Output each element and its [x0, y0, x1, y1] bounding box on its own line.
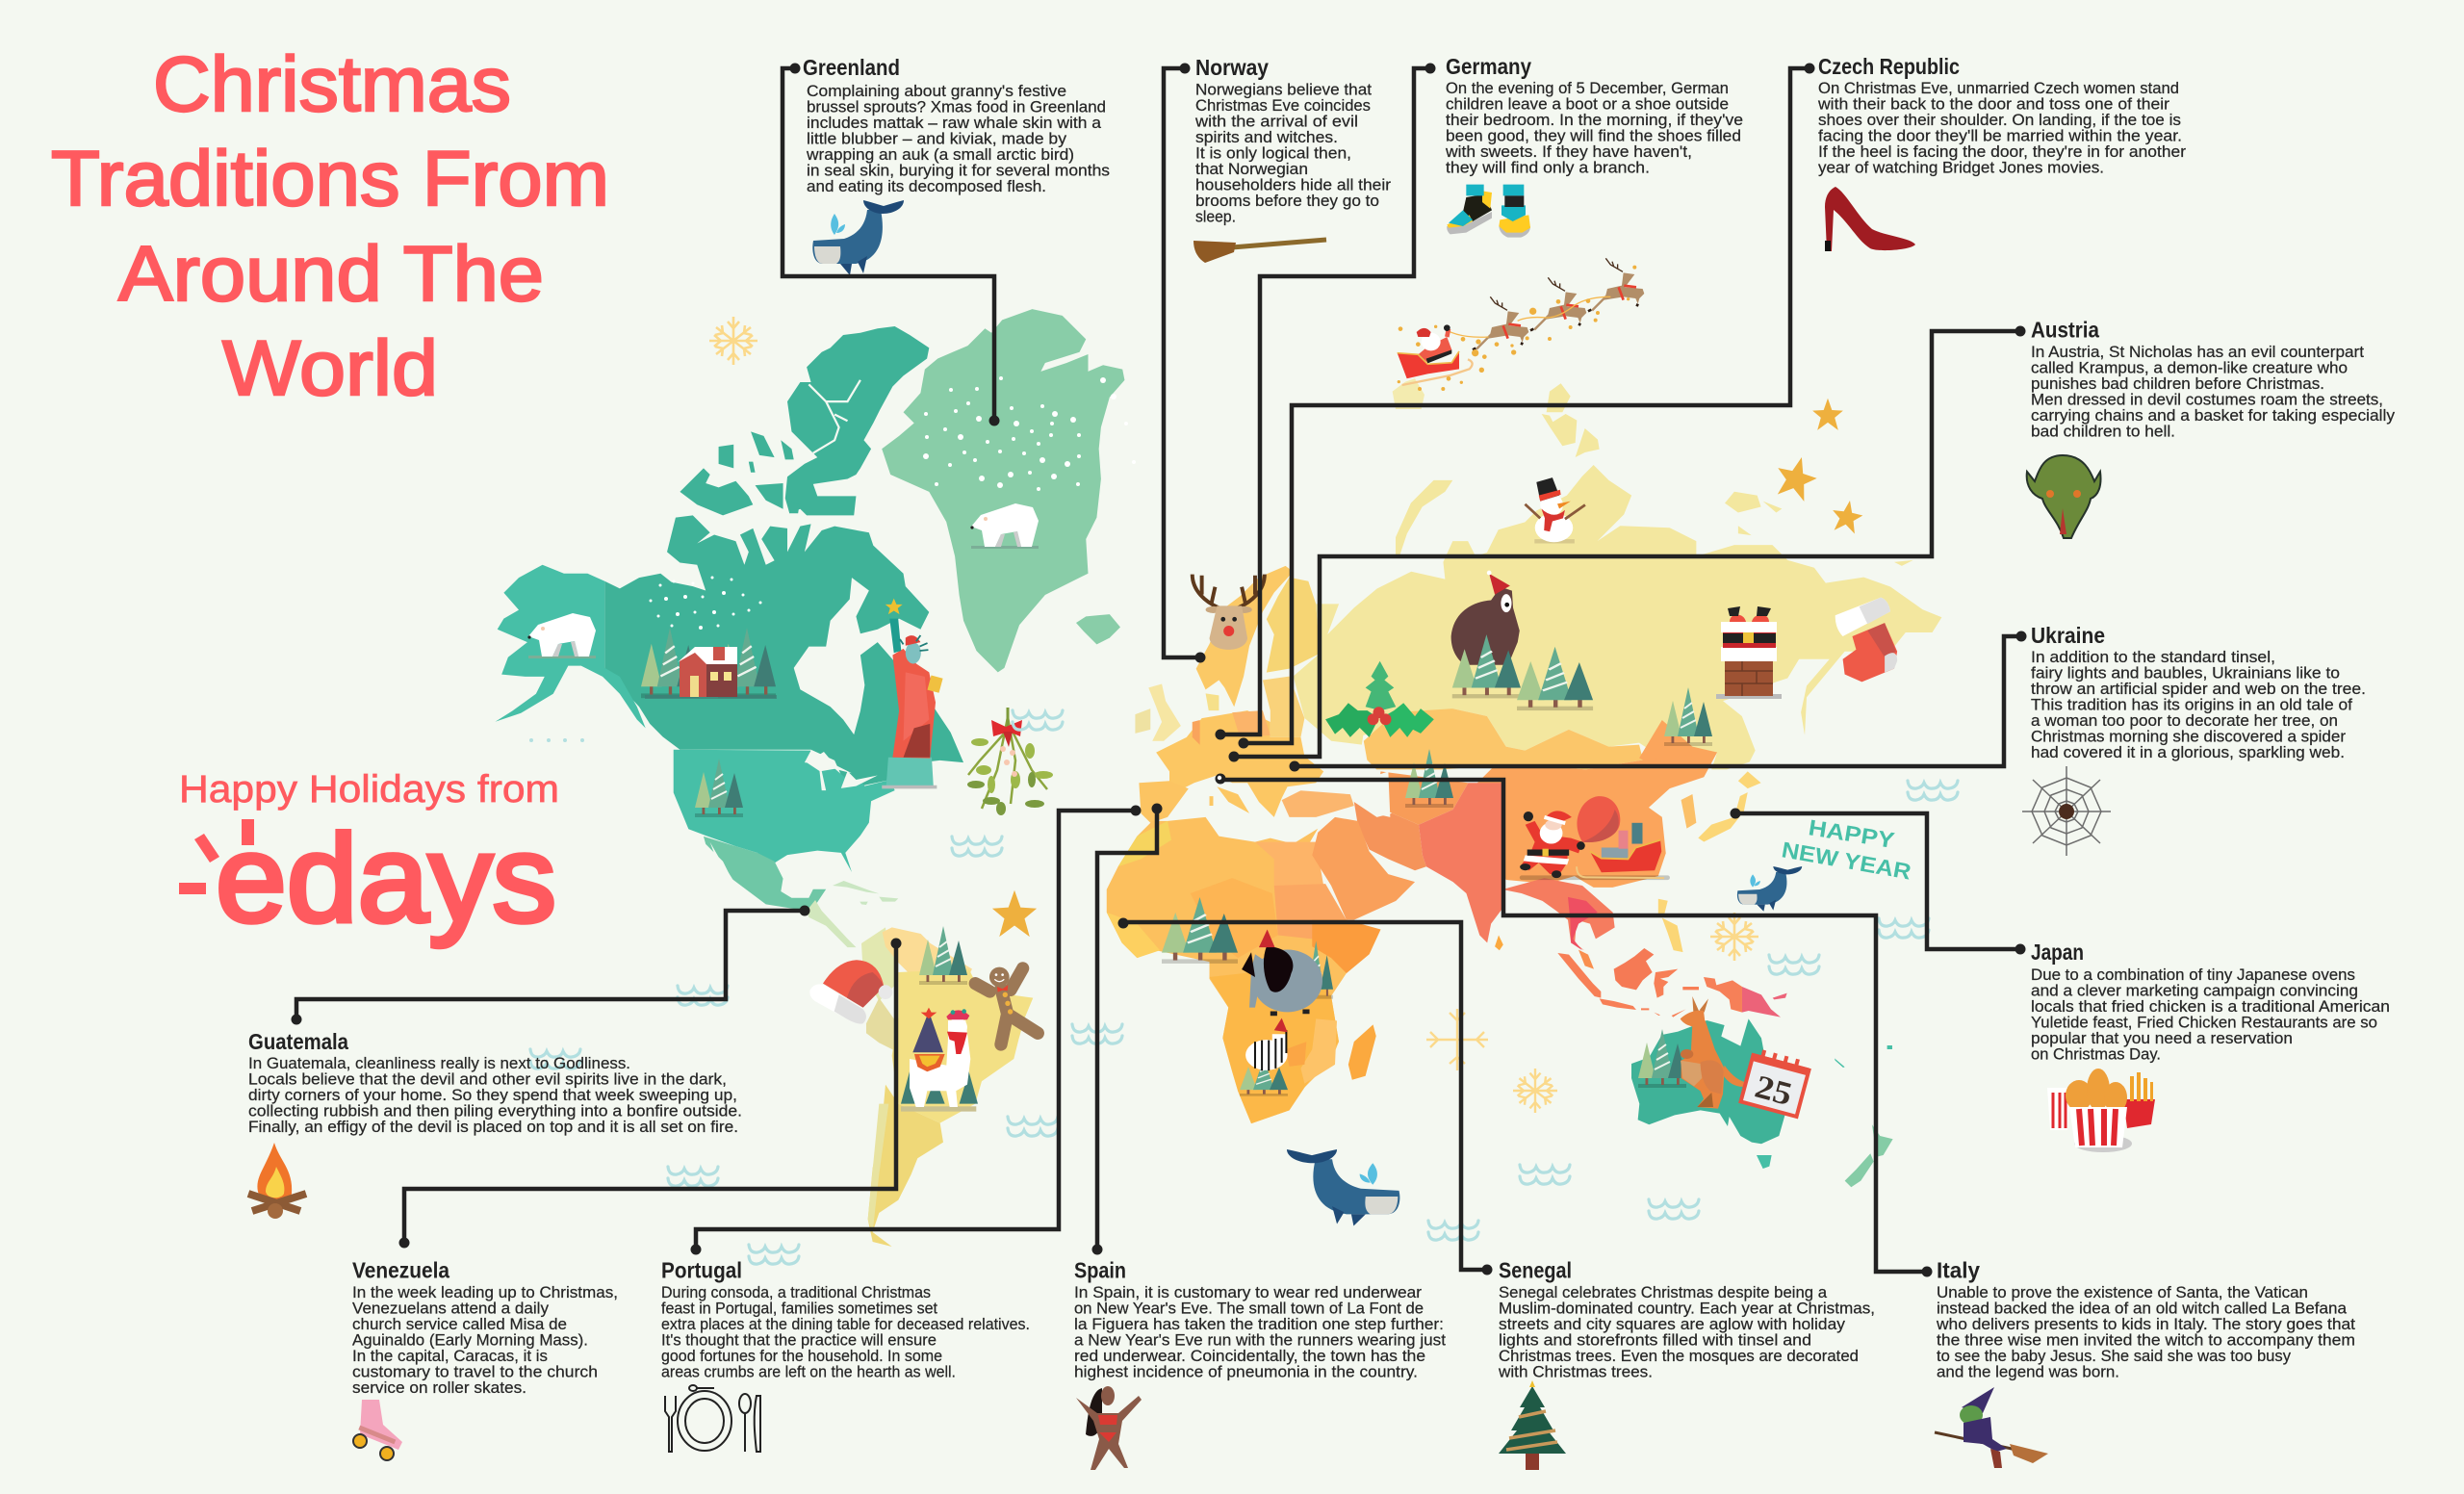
- panel: Norway: It is only logical then,: [1195, 144, 1351, 162]
- icon: Santa sleigh with reindeer: [1398, 258, 1644, 391]
- panel: Greenland: little blubber – and kiviak, made by: [807, 131, 1067, 148]
- panel: Venezuela: In the capital, Caracas, it is: [352, 1348, 548, 1365]
- icon: campfire: [248, 1143, 306, 1219]
- panel: Ukraine: fairy lights and baubles, Ukrainians like to: [2031, 664, 2340, 682]
- panel: Senegal: Senegal celebrates Christmas despite being a: [1499, 1284, 1828, 1301]
- panel: Japan: [2031, 940, 2390, 1063]
- panel: Germany: with sweets. If they have haven't,: [1445, 143, 1692, 161]
- icon: Santa with bag and sleigh: [1520, 796, 1670, 880]
- icon: trees Australia: [1638, 1029, 1686, 1088]
- edays logo: edays: [216, 810, 556, 948]
- panel: Germany: been good, they will find the shoes filled: [1446, 127, 1741, 144]
- panel: Venezuela: Aguinaldo (Early Morning Mass).: [352, 1332, 588, 1350]
- panel: Italy: Unable to prove the existence of Santa, the Vatican: [1937, 1284, 2308, 1301]
- icon: polar bear Greenland: [970, 503, 1039, 549]
- icon: woman running: [1076, 1386, 1142, 1470]
- panel: Austria: punishes bad children before Christmas.: [2031, 375, 2324, 393]
- panel: Austria: Men dressed in devil costumes roam the streets,: [2031, 391, 2383, 408]
- snowflakes: [709, 317, 1758, 1113]
- panel: Czech Republic: shoes over their shoulder. On landing, if the toe is: [1818, 112, 2181, 129]
- panel: Germany: children leave a boot or a shoe outside: [1446, 96, 1729, 114]
- connector lines: [291, 64, 2027, 1276]
- panel: Greenland: Greenland: [803, 55, 900, 80]
- panel: Venezuela: In the week leading up to Christmas,: [352, 1284, 618, 1301]
- panel: Guatemala: [248, 1029, 742, 1136]
- panel: Portugal: extra places at the dining table for deceased relatives.: [661, 1316, 1030, 1333]
- panel: Greenland: wrapping an auk (a small arctic bird): [806, 146, 1074, 164]
- icon: whale Greenland: [812, 200, 904, 275]
- snow on Greenland: [923, 376, 1136, 491]
- panel: Senegal: lights and storefronts filled with tinsel and: [1499, 1332, 1811, 1350]
- icon: Statue of Liberty: [882, 599, 943, 788]
- panel: Norway: spirits and witches.: [1195, 129, 1338, 146]
- panel: Venezuela: [352, 1257, 618, 1397]
- panel: Senegal: streets and city squares are aglow with holiday: [1499, 1316, 1846, 1333]
- panel: Venezuela: customary to travel to the church: [352, 1363, 598, 1380]
- panel: Senegal: Muslim-dominated country. Each year at Christmas,: [1499, 1300, 1875, 1317]
- panel: Venezuela: church service called Misa de: [352, 1316, 567, 1333]
- decorative dots: [529, 738, 584, 742]
- icon: llama with tree: [901, 1008, 978, 1112]
- panel: Japan: Yuletide feast, Fried Chicken Restaurants are so: [2031, 1015, 2377, 1032]
- panel: Spain: a New Year's Eve run with the runners wearing just: [1074, 1332, 1446, 1350]
- icon: calendar 25: [1741, 1047, 1811, 1117]
- panel: Greenland: in seal skin, burying it for several months: [807, 162, 1110, 179]
- icon: trees under zebra: [1240, 1058, 1288, 1096]
- happy new year text: NEW YEAR: [1780, 837, 1913, 885]
- icon: plate and cutlery: [665, 1385, 760, 1452]
- map: Caribbean and South America: [833, 881, 1033, 1247]
- edays logo: Happy Holidays from: [179, 768, 559, 811]
- panel: Guatemala: Locals believe that the devil and other evil spirits live in the dark,: [248, 1070, 727, 1088]
- icon: roller skate: [353, 1400, 402, 1460]
- icon: kangaroo: [1681, 996, 1755, 1109]
- icon: trees South America: [919, 926, 967, 985]
- panel: Portugal: good fortunes for the household. In some: [661, 1348, 942, 1365]
- panel: Czech Republic: Czech Republic: [1818, 54, 1960, 79]
- map: Indonesia, Australia, New Zealand: [1557, 948, 1893, 1187]
- title: [51, 41, 609, 412]
- panel: Czech Republic: year of watching Bridget Jones movies.: [1818, 160, 2104, 177]
- panel: Norway: Christmas Eve coincides: [1195, 97, 1371, 115]
- icon: Santa hat: [809, 960, 892, 1024]
- icon: trees East Russia: [1664, 687, 1712, 746]
- panel: Ukraine: Ukraine: [2031, 623, 2105, 648]
- panel: Portugal: Portugal: [661, 1257, 742, 1282]
- panel: Ukraine: Christmas morning she discovered a spider: [2031, 728, 2347, 745]
- icon: red high heel: [1825, 187, 1915, 251]
- panel: Spain: In Spain, it is customary to wear red underwear: [1074, 1284, 1423, 1301]
- icon: witch on broom: [1935, 1387, 2048, 1468]
- panel: Greenland: and eating its decomposed flesh.: [807, 178, 1046, 195]
- icon: snowman: [1525, 477, 1585, 543]
- panel: Italy: [1936, 1257, 2355, 1380]
- edays logo: [179, 768, 559, 948]
- panel: Senegal: Senegal: [1499, 1257, 1572, 1282]
- icon: stocking: [1835, 598, 1897, 682]
- icon: whale near Japan: [1737, 866, 1802, 912]
- panel: Guatemala: Guatemala: [248, 1029, 348, 1054]
- panel: Guatemala: In Guatemala, cleanliness really is next to Godliness.: [248, 1055, 630, 1072]
- panel: Ukraine: In addition to the standard tinsel,: [2031, 649, 2275, 666]
- icon: trees Middle East: [1405, 749, 1453, 808]
- panel: Austria: Austria: [2031, 318, 2099, 343]
- panel: Japan: on Christmas Day.: [2031, 1045, 2161, 1063]
- panel: Austria: carrying chains and a basket for taking especially: [2031, 407, 2396, 425]
- panel: Spain: [1074, 1257, 1446, 1380]
- icon: broom: [1194, 240, 1326, 263]
- panel: Portugal: areas crumbs are left on the hearth as well.: [661, 1363, 956, 1380]
- icon: trees Africa: [1162, 897, 1238, 964]
- panel: Portugal: [661, 1257, 1030, 1380]
- panel: Greenland: Complaining about granny's festive: [807, 83, 1066, 100]
- panel: Greenland: brussel sprouts? Xmas food in Greenland: [807, 98, 1106, 116]
- panel: Ukraine: had covered it in a glorious, sparkling web.: [2031, 744, 2345, 761]
- panel: Senegal: [1498, 1257, 1875, 1380]
- world map: [495, 309, 1941, 1247]
- title: Around The: [118, 231, 544, 318]
- title: Traditions From: [51, 136, 609, 222]
- panel: Ukraine: throw an artificial spider and web on the tree.: [2031, 681, 2366, 698]
- panel: Ukraine: This tradition has its origins in an old tale of: [2031, 697, 2352, 714]
- panel: Venezuela: service on roller skates.: [352, 1379, 526, 1397]
- panel: Greenland: [803, 55, 1110, 195]
- panel: Venezuela: Venezuela: [352, 1257, 449, 1282]
- snow over Canada: [649, 576, 762, 630]
- panel: Norway: with the arrival of evil: [1194, 114, 1358, 131]
- panel: Guatemala: collecting rubbish and then piling everything into a bonfire outside.: [248, 1103, 742, 1120]
- panel: Norway: sleep.: [1195, 208, 1236, 225]
- panel: Spain: la Figuera has taken the tradition one step further:: [1074, 1316, 1444, 1333]
- panel: Japan: popular that you need a reservation: [2031, 1030, 2293, 1047]
- panel: Italy: Italy: [1937, 1257, 1980, 1282]
- panel: Norway: Norway: [1195, 55, 1269, 80]
- icon: elephant: [1242, 930, 1333, 1016]
- panel: Italy: the three wise men invited the witch to accompany them: [1937, 1332, 2355, 1350]
- panel: Czech Republic: [1817, 54, 2187, 177]
- panel: Spain: red underwear. Coincidentally, the town has the: [1074, 1348, 1425, 1365]
- panel: Norway: [1194, 55, 1392, 225]
- icon: stars: [992, 399, 1865, 937]
- panel: Norway: that Norwegian: [1195, 161, 1308, 178]
- panel: Ukraine: a woman too poor to decorate her tree, on: [2031, 712, 2338, 730]
- wave decorations: [530, 710, 1958, 1264]
- panel: Germany: their bedroom. In the morning, if they've: [1446, 112, 1743, 129]
- panel: Czech Republic: facing the door they'll be married within the year.: [1818, 127, 2182, 144]
- panel: Venezuela: Venezuelans attend a daily: [352, 1300, 550, 1317]
- title: World: [222, 325, 438, 412]
- icon: large whale: [1287, 1149, 1399, 1226]
- icon: Christmas tree: [1499, 1380, 1566, 1470]
- panel: Germany: On the evening of 5 December, German: [1446, 80, 1729, 97]
- panel: Italy: to see the baby Jesus. She said she was too busy: [1937, 1348, 2292, 1365]
- map: Russian arctic islands: [1393, 378, 1600, 457]
- panel: Japan: and a clever marketing campaign convincing: [2031, 982, 2358, 999]
- panel: Spain: highest incidence of pneumonia in the country.: [1074, 1363, 1418, 1380]
- panel: Germany: Germany: [1446, 54, 1531, 79]
- panel: Spain: Spain: [1074, 1257, 1126, 1282]
- panel: Austria: [2031, 318, 2396, 441]
- panel: Norway: brooms before they go to: [1195, 193, 1379, 210]
- title: Christmas: [153, 41, 511, 128]
- map: Russia and Asia: [1294, 465, 1941, 952]
- panel: Norway: householders hide all their: [1195, 177, 1392, 194]
- panel: Portugal: During consoda, a traditional Christmas: [661, 1284, 931, 1301]
- panel: Greenland: includes mattak – raw whale skin with a: [807, 115, 1102, 132]
- icon: zebra: [1245, 1018, 1288, 1070]
- panel: Japan: Japan: [2031, 940, 2084, 965]
- panel: Japan: locals that fried chicken is a traditional American: [2031, 998, 2390, 1016]
- panel: Spain: on New Year's Eve. The small town of La Font de: [1074, 1300, 1424, 1317]
- icon: bear with hat: [1451, 571, 1520, 665]
- icon: sneakers: [1447, 185, 1530, 238]
- icon: calendar 25: 25: [1751, 1069, 1796, 1113]
- icon: Santa in chimney: [1716, 606, 1782, 699]
- map: North America and Greenland: [495, 309, 1124, 947]
- panel: Austria: In Austria, St Nicholas has an evil counterpart: [2031, 344, 2364, 361]
- icon: holly: [1325, 661, 1434, 737]
- icon: gingerbread man: [975, 967, 1038, 1044]
- panel: Portugal: feast in Portugal, families sometimes set: [661, 1300, 937, 1317]
- icon: polar bear Alaska: [527, 613, 596, 658]
- house with trees: [641, 628, 777, 699]
- icon: trees USA: [695, 759, 743, 817]
- panel: Austria: called Krampus, a demon-like creature who: [2031, 360, 2348, 377]
- panel: Italy: instead backed the idea of an old witch called La Befana: [1937, 1300, 2348, 1317]
- panel: Czech Republic: If the heel is facing the door, they're in for another: [1818, 143, 2187, 161]
- panel: Japan: Due to a combination of tiny Japanese ovens: [2031, 966, 2355, 984]
- happy new year text: HAPPY: [1807, 814, 1896, 853]
- icon: fried chicken bucket: [2047, 1069, 2155, 1152]
- panel: Senegal: Christmas trees. Even the mosques are decorated: [1499, 1348, 1859, 1365]
- icon: trees Russia: [1452, 634, 1593, 710]
- icon: mistletoe: [967, 708, 1053, 815]
- panel: Germany: they will find only a branch.: [1446, 160, 1650, 177]
- panel: Czech Republic: with their back to the door and toss one of their: [1817, 96, 2170, 114]
- panel: Ukraine: [2031, 623, 2366, 761]
- panel: Austria: bad children to hell.: [2031, 424, 2175, 441]
- panel: Italy: and the legend was born.: [1937, 1363, 2119, 1380]
- icon: Krampus head: [2027, 455, 2101, 538]
- panel: Germany: [1445, 54, 1743, 177]
- icon: spider web: [2022, 766, 2111, 856]
- panel: Senegal: with Christmas trees.: [1498, 1363, 1653, 1380]
- panel: Norway: Norwegians believe that: [1195, 81, 1372, 98]
- panel: Portugal: It's thought that the practice will ensure: [661, 1332, 937, 1350]
- panel: Guatemala: dirty corners of your home. So they spend that week sweeping up,: [248, 1087, 737, 1104]
- panel: Czech Republic: On Christmas Eve, unmarried Czech women stand: [1818, 80, 2179, 97]
- happy new year text: [1780, 814, 1913, 885]
- panel: Guatemala: Finally, an effigy of the devil is placed on top and it is all set on fire.: [248, 1119, 738, 1136]
- map: Europe, Africa, Middle East, South Asia: [1107, 566, 1615, 1123]
- icon: reindeer head: [1193, 575, 1265, 650]
- panel: Italy: who delivers presents to kids in Italy. The story goes that: [1936, 1316, 2355, 1333]
